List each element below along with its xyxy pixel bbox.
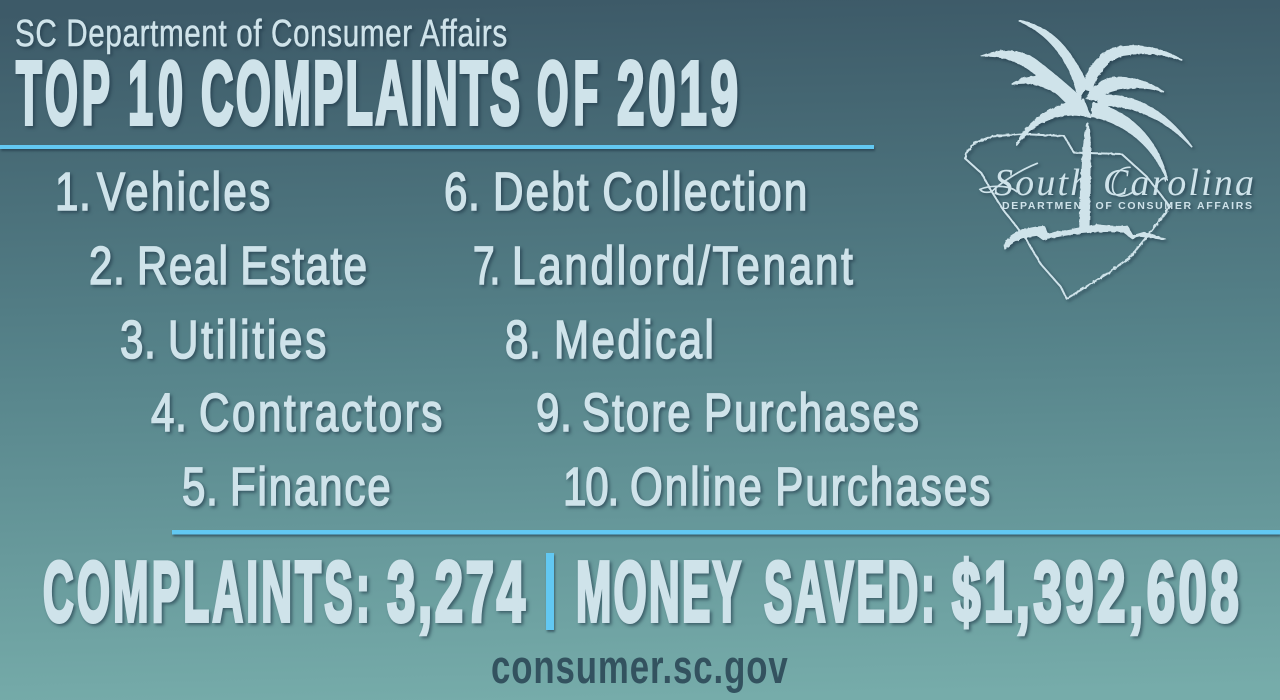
- website: consumer.sc.gov: [491, 641, 788, 693]
- item 5: 5.: [182, 457, 218, 517]
- money saved: [576, 545, 1239, 640]
- organization subtitle: SC Department of Consumer Affairs: [15, 13, 507, 55]
- complaints count: COMPLAINTS:: [43, 545, 370, 640]
- item 10: Online Purchases: [630, 457, 990, 517]
- item 4: Contractors: [199, 383, 442, 443]
- title: OF: [537, 43, 598, 143]
- complaint list: items 1 to 5: [55, 162, 442, 517]
- item 8: Medical: [554, 310, 714, 370]
- item 2: Real Estate: [137, 236, 367, 296]
- item 7: Landlord/Tenant: [512, 236, 853, 296]
- lower divider line: [172, 530, 1280, 534]
- title: 2019: [617, 43, 738, 144]
- item 9: 9.: [536, 383, 572, 443]
- money saved: SAVED:: [764, 545, 935, 640]
- item 9: Store Purchases: [582, 383, 919, 443]
- item 5: Finance: [230, 457, 391, 517]
- item 2: 2.: [89, 236, 125, 296]
- title: 10: [128, 44, 183, 144]
- top divider line: [0, 145, 874, 149]
- logo script flourishes: [980, 163, 1133, 196]
- title: [16, 42, 738, 144]
- logo: South Carolina Department of Consumer Affairs: [965, 21, 1254, 299]
- icon: state outline: [965, 134, 1170, 299]
- item 1: 1.: [55, 162, 91, 222]
- item 7: 7.: [473, 235, 500, 295]
- item 3: 3.: [120, 310, 156, 370]
- item 3: Utilities: [168, 310, 326, 370]
- vertical separator: [546, 553, 554, 630]
- title: TOP: [16, 42, 110, 143]
- title: COMPLAINTS: [201, 44, 520, 144]
- item 8: 8.: [505, 310, 541, 370]
- logo department line: DEPARTMENT OF CONSUMER AFFAIRS: [1002, 200, 1252, 212]
- item 6: 6.: [444, 162, 480, 222]
- item 6: Debt Collection: [493, 162, 807, 222]
- icon: palm tree: [982, 21, 1192, 249]
- money saved: $1,392,608: [952, 545, 1239, 639]
- money saved: MONEY: [576, 545, 741, 640]
- logo script wordmark: South Carolina: [994, 162, 1254, 204]
- item 1: Vehicles: [97, 162, 270, 222]
- complaint list: items 6 to 10: [444, 162, 990, 517]
- item 4: 4.: [151, 383, 187, 443]
- item 10: 10.: [563, 457, 619, 517]
- complaints count: 3,274: [387, 545, 525, 639]
- complaints count: [43, 545, 525, 640]
